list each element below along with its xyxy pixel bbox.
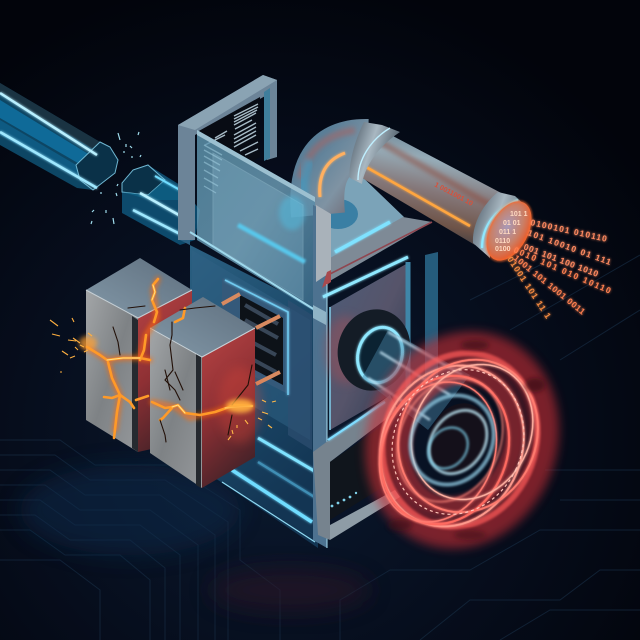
broken pipe: left section [0,83,118,190]
pipe collars [350,122,530,258]
broken pipe: right section [122,165,200,245]
binary stream: 01001 101 11 1 [505,255,553,320]
corner column [313,205,331,548]
elbow pipe [300,130,368,229]
back frame with screen [178,75,277,240]
pipe mouth: 101 1 [510,211,528,218]
binary stream [505,217,613,320]
sparks: right [226,399,276,440]
horizontal glass tube with orange beam [362,125,505,245]
screen text lines [205,104,258,155]
binary stream: 001 101 100 1010 [522,242,600,279]
molten cracks [87,279,252,442]
vortex: red data rings [354,323,570,557]
binary stream: 1001 101 1001 0011 [512,253,587,317]
binary stream: 0010 101 010 10110 [512,245,613,296]
pipe mouth: 01 01 [503,220,521,227]
horizontal glass tube with orange beam: 1 0011001 10 [433,182,474,208]
binary stream: 0100101 010110 [530,217,608,244]
sparks: left [50,318,97,372]
vortex: blue inner spiral [394,380,510,500]
binary stream: 101 10010 01 111 [526,227,613,267]
pipe mouth [477,194,541,268]
front server [150,297,262,488]
floor glow [210,568,370,612]
pipe mouth: 0110 [495,238,510,245]
lower right slab [313,395,410,540]
glass shards [91,132,141,224]
port collar [329,301,419,399]
internal circuit module [222,278,290,395]
front glass panel [190,130,315,312]
right face panel [323,257,408,430]
pipe mouth: 0100 [495,246,511,253]
dark gaps in outer smear [525,378,545,392]
back server [86,258,192,452]
top plate and bracket [326,165,432,282]
circuit traces [0,255,640,640]
outer side strip [425,252,438,385]
pipe mouth: 011 1 [499,229,516,236]
led indicators [331,492,357,507]
light pipe to vortex [362,330,470,430]
main body: left glass face [180,240,318,548]
